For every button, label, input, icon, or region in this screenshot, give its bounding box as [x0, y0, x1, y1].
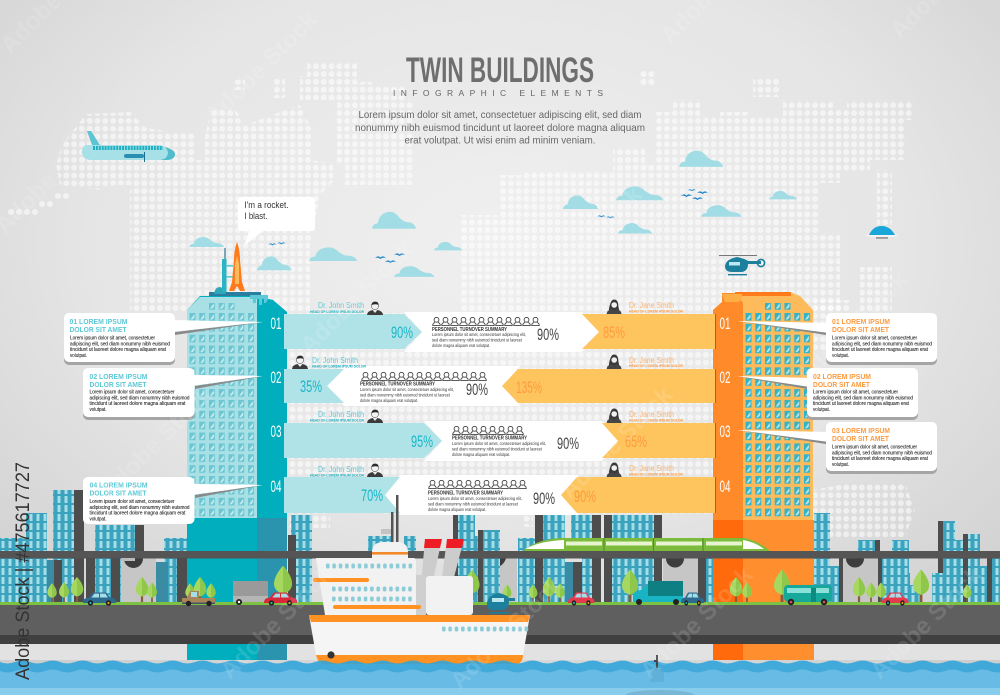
callout right 01 — [737, 313, 937, 365]
stock watermark text: Adobe Stock — [555, 381, 678, 504]
speech bubble: rocket: I blast. — [244, 211, 268, 221]
callout left 04: volutpat. — [90, 516, 107, 522]
callout right 02: DOLOR SIT AMET — [813, 380, 870, 389]
teal bar 1 — [284, 314, 422, 349]
map island chain — [8, 193, 69, 215]
teal bar 2 — [284, 369, 344, 403]
callout left 02: 02 LOREM IPSUM — [90, 372, 148, 381]
Dr. Jane Smith labels: HEAD OF LOREM IPSUM DOLOR — [629, 472, 683, 476]
callout right 03 — [737, 422, 937, 474]
turnover summary 3: PERSONNEL TURNOVER SUMMARY — [452, 436, 527, 442]
Dr. John Smith labels: Dr. John Smith — [318, 465, 364, 474]
percentages: 90% — [391, 324, 413, 342]
Dr. Jane Smith labels: HEAD OF LOREM IPSUM DOLOR — [629, 310, 683, 314]
Dr. John Smith labels: HEAD OF LOREM IPSUM DOLOR — [312, 364, 366, 368]
percentages: 90% — [574, 488, 596, 506]
callout right 03: 03 LOREM IPSUM — [832, 426, 890, 435]
turnover summary 2: PERSONNEL TURNOVER SUMMARY — [360, 382, 435, 388]
stock watermark text: Adobe Stock — [95, 381, 218, 504]
row numbers: 02 — [270, 368, 282, 387]
callout left 01: volutpat. — [70, 353, 87, 359]
row numbers: 04 — [720, 477, 730, 496]
row 3 white arrow — [424, 421, 619, 461]
turnover summary 2 — [360, 372, 487, 404]
stock watermark text: Adobe Stock — [295, 236, 418, 359]
hull — [309, 615, 530, 664]
Dr. John Smith labels: HEAD OF LOREM IPSUM DOLOR — [310, 418, 364, 422]
callout right 03: DOLOR SIT AMET — [832, 434, 889, 443]
Dr. Jane Smith labels — [607, 300, 683, 477]
callout right 01: DOLOR SIT AMET — [832, 325, 889, 334]
world map of dots — [56, 63, 915, 537]
birds — [268, 189, 708, 263]
callout left 01 — [64, 313, 263, 365]
row 4 white arrow — [385, 475, 579, 515]
water — [0, 660, 1000, 695]
intro text: nonummy nibh euismod tincidunt ut laoreet dolore magna aliquam — [355, 123, 645, 134]
callout right 02 — [737, 368, 918, 420]
Dr. John Smith labels: Dr. John Smith — [312, 356, 358, 365]
callout right 02: tincidunt ut laoreet dolore magna aliquam erat — [813, 401, 909, 407]
turnover summary 1: PERSONNEL TURNOVER SUMMARY — [432, 327, 507, 333]
rocket on launch tower — [222, 242, 245, 292]
clouds — [189, 151, 797, 277]
callout right 02: 02 LOREM IPSUM — [813, 372, 871, 381]
row 2 white arrow — [327, 366, 520, 406]
percentages: 90% — [466, 381, 488, 399]
stock watermark text: Adobe Stock — [635, 561, 758, 684]
aeroplane — [82, 131, 175, 162]
turnover summary 2: dolore magna aliquam erat volutpat. — [360, 398, 418, 404]
stock watermark text: Adobe Stock — [525, 181, 648, 304]
train — [523, 538, 770, 551]
teal bar 3 — [284, 423, 442, 458]
percentages: 85% — [603, 324, 625, 342]
left building: teal tower — [187, 287, 287, 660]
dome — [372, 542, 408, 558]
percentages: 65% — [625, 433, 647, 451]
callout right 03: tincidunt ut laoreet dolore magna aliquam erat — [832, 456, 928, 462]
right building: orange tower — [713, 292, 814, 660]
masts — [391, 495, 398, 542]
turnover summary 4: dolore magna aliquam erat volutpat. — [428, 507, 486, 513]
turnover summary 1: Lorem ipsum dolor sit amet, consectetuer adipiscing elit, — [432, 332, 526, 338]
stock watermark text: Adobe Stock — [865, 561, 988, 684]
callout left 04: DOLOR SIT AMET — [90, 488, 147, 498]
intro text — [355, 110, 645, 146]
trees — [47, 566, 971, 602]
Dr. Jane Smith labels: Dr. Jane Smith — [629, 356, 674, 365]
turnover summary 2: sed diam nonummy nibh euismod tincidunt ut laoreet — [360, 392, 451, 398]
orange bar 2 — [502, 369, 716, 403]
callout right 02: volutpat. — [813, 407, 830, 413]
callout left 02 — [83, 368, 263, 420]
turnover summary 3: sed diam nonummy nibh euismod tincidunt ut laoreet — [452, 446, 543, 452]
callout left 01: tincidunt ut laoreet dolore magna aliquam erat — [70, 347, 166, 353]
turnover summary 4: sed diam nonummy nibh euismod tincidunt ut laoreet — [428, 502, 519, 508]
percentages: 135% — [516, 379, 542, 397]
Dr. John Smith labels: HEAD OF LOREM IPSUM DOLOR — [310, 310, 364, 314]
row 1 white arrow — [404, 312, 600, 352]
callout left 01: Lorem ipsum dolor sit amet, consectetuer — [70, 336, 155, 342]
callout right 01: Lorem ipsum dolor sit amet, consectetuer — [832, 336, 917, 342]
turnover summary 4: PERSONNEL TURNOVER SUMMARY — [428, 490, 503, 496]
Dr. Jane Smith labels: Dr. Jane Smith — [629, 464, 674, 473]
callout right 03: adipiscing elit, sed diam nonummy nibh euismod — [832, 450, 932, 456]
Dr. John Smith labels: HEAD OF LOREM IPSUM DOLOR — [310, 474, 364, 478]
percentages: 90% — [557, 435, 579, 453]
row numbers: 04 — [270, 477, 282, 496]
callout right 02: Lorem ipsum dolor sit amet, consectetuer — [813, 390, 898, 396]
callout right 01: 01 LOREM IPSUM — [832, 317, 890, 326]
callout left 04 — [83, 477, 263, 524]
row numbers — [270, 314, 730, 496]
percentages — [300, 324, 647, 508]
callout right 01: tincidunt ut laoreet dolore magna aliquam erat — [832, 347, 928, 353]
turnover summary 4 — [428, 480, 527, 513]
title: TWIN BUILDINGS — [406, 51, 594, 90]
percentages: 70% — [361, 487, 383, 505]
callout left 04: Lorem ipsum dolor sit amet, consectetuer — [90, 499, 175, 505]
superstructure — [316, 558, 416, 615]
row numbers: 01 — [270, 314, 282, 333]
callout left 02: volutpat. — [90, 407, 107, 413]
Dr. John Smith labels: Dr. John Smith — [318, 410, 364, 419]
Dr. Jane Smith labels: HEAD OF LOREM IPSUM DOLOR — [629, 418, 683, 422]
stock watermark text: Adobe Stock — [790, 266, 913, 389]
subtitle: INFOGRAPHIC ELEMENTS — [393, 88, 603, 98]
callout left 01: adipiscing elit, sed diam nonummy nibh euismod — [70, 341, 170, 347]
stock watermark text: Adobe Stock — [215, 561, 338, 684]
callout left 02: tincidunt ut laoreet dolore magna aliquam erat — [90, 401, 186, 407]
callout left 02: DOLOR SIT AMET — [90, 380, 147, 389]
turnover summary 4: Lorem ipsum dolor sit amet, consectetuer adipiscing elit, — [428, 496, 522, 502]
Dr. Jane Smith labels: Dr. Jane Smith — [629, 410, 674, 419]
callout left 02: adipiscing elit, sed diam nonummy nibh euismod — [90, 395, 190, 401]
speech bubble: rocket — [238, 197, 315, 245]
vehicles — [83, 581, 908, 614]
percentages: 90% — [533, 490, 555, 508]
road — [0, 602, 1000, 660]
Dr. John Smith labels: Dr. John Smith — [318, 301, 364, 310]
icon: ufo — [866, 226, 898, 239]
speech bubble: rocket: I'm a rocket. — [244, 200, 288, 210]
callout right 01: adipiscing elit, sed diam nonummy nibh euismod — [832, 341, 932, 347]
Dr. Jane Smith labels: HEAD OF LOREM IPSUM DOLOR — [629, 364, 683, 368]
ship — [309, 495, 530, 664]
callout left 04: adipiscing elit, sed diam nonummy nibh euismod — [90, 505, 190, 511]
Dr. John Smith labels — [292, 301, 383, 478]
row numbers: 02 — [720, 368, 730, 387]
funnels — [421, 539, 442, 585]
row numbers: 03 — [270, 422, 282, 441]
stock watermark text: Adobe Stock — [200, 6, 323, 129]
callout left 02: Lorem ipsum dolor sit amet, consectetuer — [90, 390, 175, 396]
orange bar 3 — [602, 423, 716, 458]
turnover summary 3 — [452, 426, 546, 458]
submarine periscope — [626, 655, 694, 695]
intro text: erat volutpat. Ut wisi enim ad minim veniam. — [404, 136, 596, 146]
Dr. Jane Smith labels: Dr. Jane Smith — [629, 301, 674, 310]
callout right 03: volutpat. — [832, 462, 849, 468]
teal bar 4 — [284, 477, 400, 513]
callout right 02: adipiscing elit, sed diam nonummy nibh euismod — [813, 395, 913, 401]
vertical stock id: Adobe Stock | #475617727 — [13, 462, 34, 680]
percentages: 35% — [300, 378, 322, 396]
bar edge lines — [714, 314, 716, 513]
callout left 04: 04 LOREM IPSUM — [90, 480, 148, 490]
overpass with arches — [0, 551, 1000, 602]
callout left 01: DOLOR SIT AMET — [70, 325, 127, 334]
turnover summary 2: Lorem ipsum dolor sit amet, consectetuer adipiscing elit, — [360, 387, 454, 393]
intro text: Lorem ipsum dolor sit amet, consectetuer adipiscing elit, sed diam — [358, 110, 642, 121]
orange bar 4 — [561, 477, 716, 513]
callout left 01: 01 LOREM IPSUM — [70, 317, 128, 326]
stock watermark text: Adobe Stock — [445, 571, 568, 694]
turnover summary 3: Lorem ipsum dolor sit amet, consectetuer adipiscing elit, — [452, 441, 546, 447]
callout left 04: tincidunt ut laoreet dolore magna aliquam erat — [90, 511, 186, 517]
orange bar 1 — [582, 314, 716, 349]
helicopter — [719, 255, 765, 275]
percentages: 95% — [411, 433, 433, 451]
percentages: 90% — [537, 326, 559, 344]
callout right 03: Lorem ipsum dolor sit amet, consectetuer — [832, 444, 917, 450]
turnover summary 1: sed diam nonummy nibh euismod tincidunt ut laoreet — [432, 338, 523, 344]
turnover summary 3: dolore magna aliquam erat volutpat. — [452, 452, 510, 458]
turnover summary 1: dolore magna aliquam erat volutpat. — [432, 343, 490, 349]
callout right 01: volutpat. — [832, 353, 849, 359]
skyline behind overpass — [0, 490, 1000, 602]
row numbers: 03 — [720, 422, 730, 441]
row numbers: 01 — [720, 314, 730, 333]
turnover summary 1 — [432, 317, 540, 349]
